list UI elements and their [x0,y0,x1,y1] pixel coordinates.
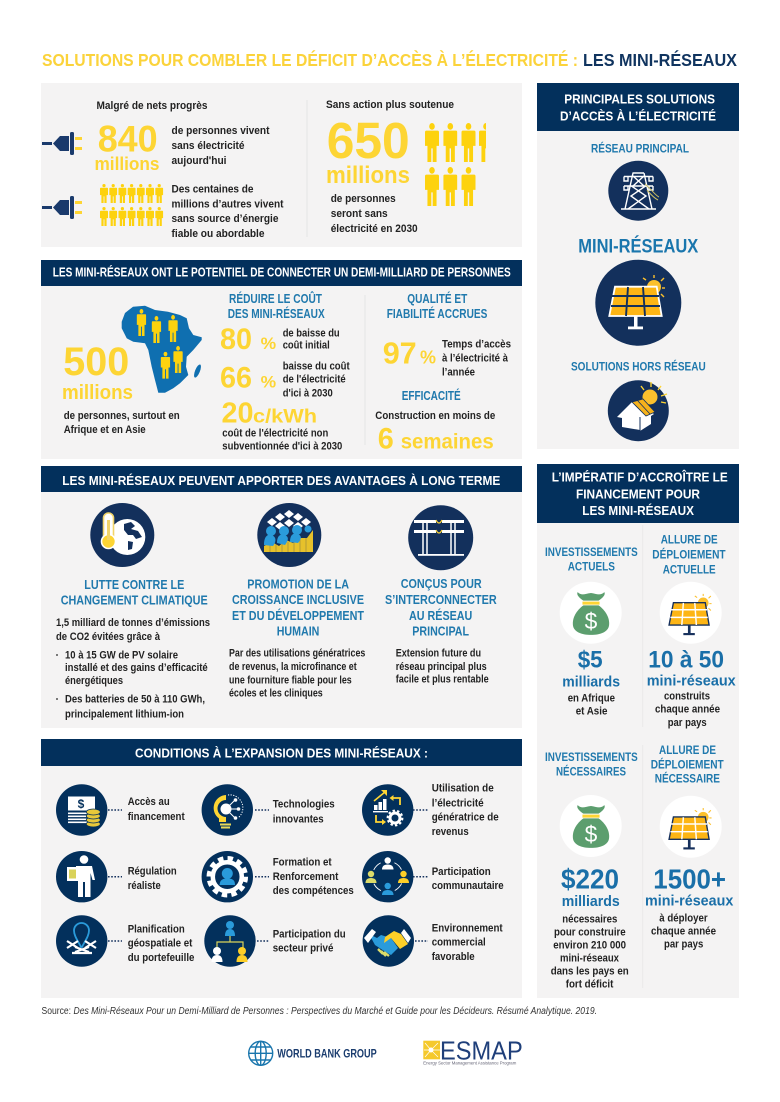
column: needed deployment: ALLURE DE [659,745,716,757]
stat: 20 c/kWh: subventionnée d'ici à 2030 [222,440,342,452]
condition: productive use of electricity: revenus [432,826,469,838]
stat: 840 millions: millions [94,154,160,174]
heading: main solutions: D’ACCÈS À L’ÉLECTRICITÉ [560,109,716,124]
column: needed investment: dans les pays en [551,965,629,977]
condition: favourable business environment: commercial [432,937,486,949]
text: climate details: 10 à 15 GW de PV solaire [65,649,178,661]
text: interconnection details [396,648,489,686]
column: current deployment: par pays [668,717,707,729]
column: current deployment [647,534,736,729]
stat: 97 percent: % [420,347,436,367]
icon: interconnected pylons [408,505,473,570]
stat: 80 percent [220,323,340,356]
heading: financing: LES MINI-RÉSEAUX [582,503,694,518]
logo: ESMAP: Energy Sector Management Assistance Program [423,1060,517,1066]
stat: 500 millions: millions [62,382,133,404]
column: current investment: milliards [562,675,620,691]
condition: favourable business environment: Environnement [432,923,503,935]
stat: 840 millions: 840 [98,119,158,160]
text: growth details: de revenus, la microfinance et [229,661,357,673]
logo: World Bank Group: WORLD BANK GROUP [277,1048,377,1060]
condition: geospatial planning: du portefeuille [128,952,194,964]
panel: financing imperative [537,464,739,998]
heading: conditions: CONDITIONS À L’EXPANSION DES MINI-RÉSEAUX : [135,746,428,761]
heading: quality: FIABILITÉ ACCRUES [387,306,487,321]
stat: 66 percent: baisse du coût [283,360,350,372]
text: hundreds of millions description: millions d’autres vivent [172,199,284,211]
column: needed deployment: à déployer [659,913,708,925]
column: current investment: en Afrique [568,693,615,705]
text: hundreds of millions description: Des centaines de [172,184,254,196]
condition: realistic regulation: réaliste [128,880,161,892]
heading: potential: LES MINI-RÉSEAUX ONT LE POTENTIEL DE CONNECTER UN DEMI-MILLIARD DE PERSONNES [53,265,511,280]
text: climate details: Des batteries de 50 à 110 GWh, [65,693,205,705]
stat: 97 percent: Temps d’accès [442,338,511,350]
panel: access deficit [41,83,522,247]
condition: access to finance: financement [128,811,185,823]
condition: innovative technologies: Technologies [273,799,335,811]
text: 650 million description: électricité en 2030 [331,223,418,235]
panel: long-term benefits [41,466,522,728]
condition: private sector participation: secteur privé [273,943,333,955]
text: inclusive growth: HUMAIN [277,625,319,639]
text: inclusive growth: CROISSANCE INCLUSIVE [232,593,364,607]
column: current investment: et Asie [576,705,607,717]
text: interconnection details: réseau principal plus [396,661,487,673]
stat: 6 weeks: semaines [401,430,494,453]
label: main grid: RÉSEAU PRINCIPAL [591,143,689,156]
stat: 80 percent: 80 [220,323,252,356]
text: 840 million description: sans électricité [172,140,244,152]
condition: productive use of electricity: Utilisation de [432,783,494,795]
heading: main solutions: PRINCIPALES SOLUTIONS [564,91,715,106]
column: current deployment: construits [664,690,710,702]
column: needed investment: $220 [561,863,619,894]
logo: World Bank Group [249,1041,377,1065]
column: needed deployment: par pays [664,938,703,950]
text: fight climate change: CHANGEMENT CLIMATIQUE [61,593,208,607]
column: current investment: $5 [578,646,603,673]
stat: 66 percent: % [261,372,276,391]
condition: access to finance: Accès au [128,796,170,808]
text: hundreds of millions description: fiable ou abordable [172,228,264,240]
text: interconnection [385,577,497,639]
text: hundreds of millions description: sans source d’énergie [172,213,278,225]
text: interconnection: S’INTERCONNECTER [385,593,497,607]
column: needed investment: environ 210 000 [553,939,626,951]
source note: Des Mini-Réseaux Pour un Demi-Milliard de Personnes : Perspectives du Marché et Guide pour les Décideurs. Résumé Analytique. 2019. [74,1006,597,1017]
stat: 97 percent: 97 [383,335,417,370]
text: hundreds of millions description [172,184,284,240]
heading: quality [387,291,487,321]
column: needed investment: fort déficit [566,978,614,990]
label: off-grid solutions: SOLUTIONS HORS RÉSEAU [571,361,706,374]
text: inclusive growth [232,577,364,639]
stat: 80 percent: coût initial [283,340,330,352]
column: needed investment: NÉCESSAIRES [556,766,626,779]
title: LES MINI-RÉSEAUX [583,49,737,70]
heading: efficiency: EFFICACITÉ [402,388,461,403]
condition: training and capacity building: des compétences [273,885,354,897]
column: needed investment: nécessaires [562,913,617,925]
icon: rows of large people [425,123,493,206]
column: needed investment: INVESTISSEMENTS [545,752,638,764]
condition: community participation: Participation [432,866,491,878]
text: interconnection: PRINCIPAL [412,625,469,639]
text: 650 million description [331,193,418,235]
heading: reduce cost [228,291,325,321]
column: needed investment [545,752,638,990]
column: needed deployment [645,745,733,950]
condition: innovative technologies: innovantes [273,813,324,825]
text: climate details: énergétiques [65,675,123,687]
text: climate details: installé et des gains d’efficacité [65,662,208,674]
panel: main access solutions [537,83,739,449]
text: inclusive growth: ET DU DÉVELOPPEMENT [232,608,364,623]
condition: innovative technologies [202,784,335,836]
stat: 6 weeks: 6 [378,422,394,455]
text: 840 million description: aujourd'hui [172,155,226,167]
heading: financing: FINANCEMENT POUR [576,486,701,501]
label: mini-grids: MINI-RÉSEAUX [578,236,699,258]
title: SOLUTIONS POUR COMBLER LE DÉFICIT D’ACCÈS À L’ÉLECTRICITÉ : [42,49,578,70]
condition: productive use of electricity: l’électricité [432,798,484,810]
column: needed deployment: mini-réseaux [645,894,733,910]
condition: training and capacity building: Formation et [273,857,332,869]
text: interconnection details: Extension future du [396,648,481,660]
heading: financing [552,470,728,518]
condition: favourable business environment: favorable [432,951,475,963]
stat: 97 percent: à l’électricité à [442,353,509,365]
condition: community participation [362,851,504,902]
icon: plug 2 [42,196,82,219]
text: 840 million description: de personnes vivent [172,125,270,137]
panel: half a billion potential [41,260,522,459]
column: needed deployment: NÉCESSAIRE [655,773,720,786]
stat: 66 percent [220,360,350,400]
icon: people and growth chart [257,503,321,567]
condition: training and capacity building [202,851,354,902]
heading: main solutions [560,91,716,124]
text: inclusive growth: PROMOTION DE LA [247,577,349,591]
condition: productive use of electricity [362,783,499,838]
column: current investment: INVESTISSEMENTS [545,547,638,559]
text: growth details [229,648,365,700]
text: without action heading: Sans action plus soutenue [326,99,454,111]
column: needed deployment: 1500+ [653,863,726,894]
source note: Source: [42,1006,71,1017]
stat: 66 percent: 66 [220,361,252,394]
heading: benefits: LES MINI-RÉSEAUX PEUVENT APPORTER DES AVANTAGES À LONG TERME [62,473,501,488]
text: climate details: de CO2 évitées grâce à [56,631,161,643]
column: needed deployment: chaque année [651,925,716,937]
column: needed investment: pour construire [554,927,626,939]
stat: 6 weeks: Construction en moins de [375,410,495,422]
icon: solar panel [595,260,681,346]
text: 500 million description [64,410,180,436]
heading: financing: L’IMPÉRATIF D’ACCROÎTRE LE [552,470,728,485]
text: growth details: une fourniture fiable pour les [229,674,352,686]
condition: training and capacity building: Renforcement [273,871,339,883]
stat: 97 percent [383,335,511,379]
condition: community participation: communautaire [432,880,504,892]
stat: 80 percent: % [261,334,276,353]
icon: plug [42,132,82,155]
condition: geospatial planning [56,915,194,967]
condition: realistic regulation: Régulation [128,865,177,877]
condition: geospatial planning: géospatiale et [128,938,193,950]
text: 840 million description [172,125,270,167]
column: needed investment: milliards [562,894,620,910]
column: current deployment: ACTUELLE [663,564,716,576]
column: current deployment: chaque année [655,704,720,716]
text: climate details [56,617,210,720]
text: interconnection: AU RÉSEAU [409,608,472,623]
text: growth details: Par des utilisations génératrices [229,648,365,660]
text: climate details: 1,5 milliard de tonnes d’émissions [56,617,210,629]
condition: private sector participation [204,915,346,967]
text: growth details: écoles et les cliniques [229,688,323,700]
condition: access to finance [56,784,185,836]
condition: geospatial planning: Planification [128,924,185,936]
stat: 500 millions [62,340,133,404]
text: 650 million description: de personnes [331,193,396,205]
stat: 20 c/kWh: c/kWh [253,405,317,427]
column: current deployment: 10 à 50 [648,646,724,673]
text: 500 million description: de personnes, surtout en [64,410,180,422]
condition: access to finance: $ [78,797,85,811]
icon: power pylon [608,161,668,221]
heading: reduce cost: RÉDUIRE LE COÛT [229,291,322,306]
column: current investment: ACTUELS [568,562,615,574]
heading: reduce cost: DES MINI-RÉSEAUX [228,306,325,321]
text: 500 million description: Afrique et en Asie [64,424,146,436]
stat: 20 c/kWh [222,397,342,452]
text: climate details: principalement lithium-ion [65,708,184,720]
stat: 66 percent: de l'électricité [283,373,346,385]
icon: thermometer and globe [90,503,154,567]
column: current deployment: mini-réseaux [647,674,736,690]
stat: 80 percent: de baisse du [283,328,340,340]
logo: ESMAP: ESMAP [440,1035,523,1065]
condition: private sector participation: Participation du [273,928,346,940]
column: current deployment: ALLURE DE [661,534,718,546]
text: interconnection: CONÇUS POUR [401,577,482,591]
map: Africa with people [122,306,202,393]
condition: productive use of electricity: génératrice de [432,812,499,824]
text: despite progress heading: Malgré de nets progrès [96,100,208,112]
icon: solar house [608,380,669,441]
text: fight climate change: LUTTE CONTRE LE [84,578,184,592]
text: fight climate change [61,578,208,607]
stat: 650 millions: millions [326,162,410,189]
text: interconnection details: facile et plus rentable [396,674,489,686]
icon: rows of small people [100,184,163,226]
stat: 6 weeks [375,410,495,455]
stat: 650 millions: 650 [327,112,410,169]
text: 650 million description: seront sans [331,208,388,220]
stat: 66 percent: d'ici à 2030 [283,388,333,400]
column: current deployment: DÉPLOIEMENT [652,548,726,561]
stat: 500 millions: 500 [63,340,129,384]
condition: realistic regulation [56,851,177,902]
panel: conditions for expansion [41,739,522,998]
stat: 20 c/kWh: 20 [222,397,254,429]
column: needed investment: mini-réseaux [560,953,620,965]
column: current investment [545,547,638,717]
condition: favourable business environment [363,915,503,967]
heading: quality: QUALITÉ ET [407,291,468,306]
stat: 97 percent: l’année [442,367,475,379]
column: needed deployment: DÉPLOIEMENT [651,758,724,771]
stat: 20 c/kWh: coût de l'électricité non [222,428,329,440]
